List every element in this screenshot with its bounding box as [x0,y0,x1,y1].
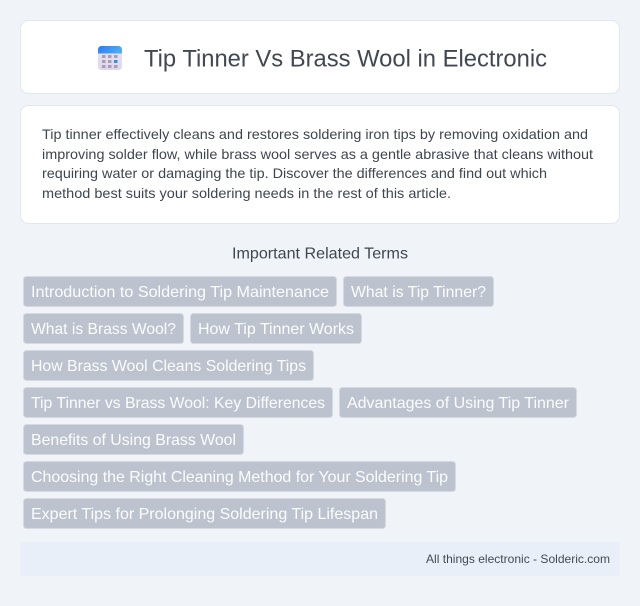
tag [340,388,576,418]
tag [190,314,362,344]
panel: title card [20,20,620,94]
text block: introduction: requiring water or damaging the tip. Discover the differences and find out which [42,165,547,181]
tag [24,314,184,344]
tag: Benefits of Using Brass Wool [31,432,236,449]
tag: Choosing the Right Cleaning Method for Your Soldering Tip [31,469,448,486]
icon: calendar [98,46,122,70]
tag: What is Brass Wool? [31,321,176,338]
tag: Expert Tips for Prolonging Soldering Tip Lifespan [31,506,378,523]
tag: Advantages of Using Tip Tinner [347,395,570,412]
tag [344,276,494,306]
text block: introduction: improving solder flow, while brass wool serves as a gentle abrasive that cleans without [42,146,593,162]
footer [20,542,620,576]
tag: Tip Tinner vs Brass Wool: Key Differences [31,395,325,412]
heading: related terms: Important Related Terms [232,246,408,262]
tag: Introduction to Soldering Tip Maintenance [31,284,329,301]
tag [24,462,456,492]
tag: How Tip Tinner Works [198,321,354,338]
footer: All things electronic - Solderic.com [426,552,610,566]
tag [24,350,314,380]
tag [24,498,386,528]
tag: What is Tip Tinner? [351,284,486,301]
title: Tip Tinner Vs Brass Wool in Electronic [144,46,547,72]
tag [24,424,244,454]
text block: introduction: method best suits your soldering needs in the rest of this article. [42,185,451,201]
panel: term tags [24,276,576,528]
text block: introduction [42,126,593,201]
panel: intro text card [20,106,620,224]
text block: introduction: Tip tinner effectively cleans and restores soldering iron tips by removing oxidation and [42,126,588,142]
tag [24,388,332,418]
tag [24,276,336,306]
tag: How Brass Wool Cleans Soldering Tips [31,358,306,375]
